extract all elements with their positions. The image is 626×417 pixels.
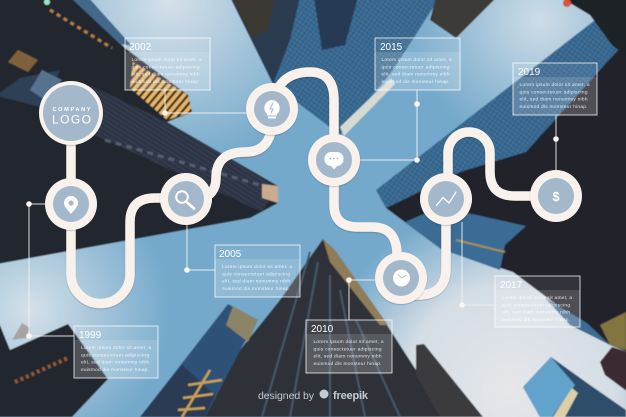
text box: 2002: euismod dis monsteur hinap. — [132, 79, 200, 85]
text box: 2019: Lorem ipsum dolor sit amet, a — [520, 82, 590, 88]
text box: 2010: elit, sed diam nonummy nibh — [314, 354, 382, 360]
text box: 2019: 2019 — [518, 67, 541, 78]
text box: 1999: 1999 — [79, 330, 102, 341]
text box: 2015: 2015 — [380, 42, 403, 53]
text box: 2015: quis consectetuer adipiscing — [382, 64, 450, 70]
text box: 2019: elit, sed diam nonummy nibh — [520, 97, 588, 103]
watermark: designed by freepik: freepik — [333, 390, 369, 402]
text box: 2010: 2010 — [311, 324, 334, 335]
text box: 2015 — [375, 38, 460, 90]
text box: 2015: elit, sed diam nonummy nibh — [382, 72, 450, 78]
building: top left tower — [0, 0, 278, 264]
text box: 2017: euismod dis monsteur hinap. — [502, 317, 570, 323]
building: small brown block — [430, 0, 497, 38]
text box: 2017: 2017 — [500, 280, 523, 291]
logo badge: LOGO — [52, 112, 91, 126]
text box: 2015: euismod dis monsteur hinap. — [382, 79, 450, 85]
building: top center tower — [230, 0, 440, 136]
text box: 2017: elit, sed diam nonummy nibh — [502, 310, 570, 316]
building: right tower — [376, 0, 626, 352]
logo badge — [39, 81, 103, 145]
text box: 2017: Lorem ipsum dolor sit amet, a — [502, 295, 572, 301]
watermark: designed by freepik — [258, 390, 369, 402]
text box: 1999: Lorem ipsum dolor sit amet, a — [81, 345, 151, 351]
logo badge: COMPANY — [52, 107, 91, 113]
node: light bulb — [246, 83, 298, 135]
text box: 2010: Lorem ipsum dolor sit amet, a — [314, 339, 384, 345]
text box: 2002: 2002 — [129, 42, 152, 53]
text box: 2005: euismod dis monsteur hinap. — [222, 286, 290, 292]
text box: 2005 — [215, 245, 300, 297]
text box: 2002: quis consectetuer adipiscing — [132, 64, 200, 70]
text box: 2005: 2005 — [219, 249, 242, 260]
building: bottom right glass — [523, 347, 626, 417]
text box: 2010 — [306, 320, 392, 373]
text box: 2015: Lorem ipsum dolor sit amet, a — [382, 57, 452, 63]
text box: 1999: elit, sed diam nonummy nibh — [81, 360, 149, 366]
text box: 2010: euismod dis monsteur hinap. — [314, 361, 382, 367]
text box: 2005: Lorem ipsum dolor sit amet, a — [222, 264, 292, 270]
text box: 2019: quis consectetuer adipiscing — [520, 89, 588, 95]
node: chat bubble — [308, 134, 360, 186]
node: clock — [375, 252, 427, 304]
building: distant tower — [416, 344, 483, 417]
building: lower left blue tower — [140, 304, 258, 417]
text box: 2002 — [125, 38, 210, 90]
text box: 2019 — [513, 63, 597, 115]
text box: 2019: euismod dis monsteur hinap. — [520, 104, 588, 110]
building: bottom left block — [0, 318, 108, 417]
building: bottom center tower — [205, 239, 452, 417]
node: location pin — [45, 178, 97, 230]
node: magnifier — [160, 173, 212, 225]
text box: 2002: elit, sed diam nonummy nibh — [132, 72, 200, 78]
text box: 1999: quis consectetuer adipiscing — [81, 352, 149, 358]
text box: 2005: elit, sed diam nonummy nibh — [222, 279, 290, 285]
node: dollar: $ — [552, 189, 560, 204]
timeline path — [71, 72, 556, 304]
watermark: designed by freepik: designed by — [258, 390, 315, 402]
text box: 2017: quis consectetuer adipiscing — [502, 302, 570, 308]
node: line chart — [420, 173, 472, 225]
text box: 2017 — [495, 276, 580, 327]
node: dollar — [530, 170, 582, 222]
text box: 1999 — [74, 326, 158, 378]
text box: 1999: euismod dis monsteur hinap. — [81, 367, 149, 373]
text box: 2010: quis consectetuer adipiscing — [314, 346, 382, 352]
text box: 2002: Lorem ipsum dolor sit amet, a — [132, 57, 202, 63]
connector lines and dots — [26, 90, 559, 339]
text box: 2005: quis consectetuer adipiscing — [222, 271, 290, 277]
